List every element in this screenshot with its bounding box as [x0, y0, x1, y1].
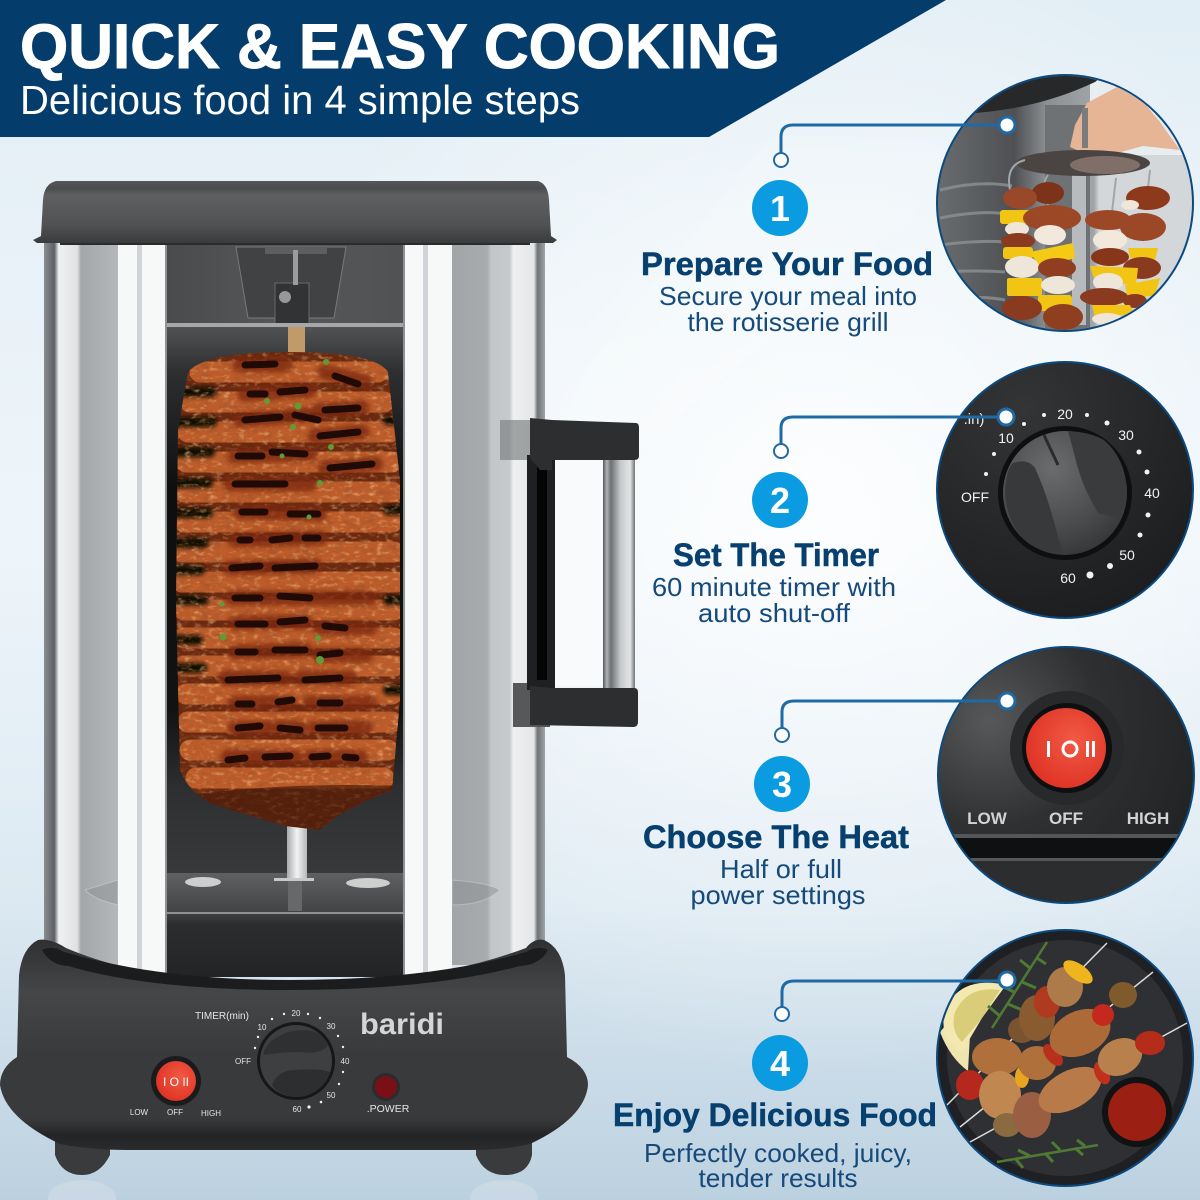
subtitle: Delicious food in 4 simple steps [20, 77, 580, 123]
description: power settings [690, 880, 866, 910]
timer ticks [254, 1013, 344, 1109]
panel labels: TIMER(min) [195, 1011, 249, 1022]
product: rotisserie grill [0, 181, 639, 1175]
glass bottom lip [42, 948, 548, 990]
power switch [151, 1056, 201, 1106]
charred underside [197, 785, 392, 830]
step 2 [652, 355, 1200, 628]
panel labels: 20 [292, 1009, 301, 1018]
leader line [775, 972, 1015, 1021]
description: auto shut-off [698, 598, 851, 628]
panel labels [130, 1009, 410, 1118]
description [659, 281, 917, 337]
leader line [775, 693, 1015, 742]
side shadows [170, 392, 405, 690]
drip tray [85, 873, 500, 977]
description: Secure your meal into [659, 281, 917, 311]
right skewer food [1080, 186, 1170, 325]
herb flecks [220, 359, 334, 664]
left skewer food [1000, 182, 1083, 330]
panel labels: LOW [130, 1108, 149, 1117]
photo: timer dial [930, 355, 1200, 625]
panel labels: 10 [258, 1023, 267, 1032]
panel labels: OFF [235, 1057, 251, 1066]
sear halos [225, 365, 375, 757]
photo: timer dial: 10 [998, 430, 1014, 446]
feet [55, 1140, 532, 1175]
heading: Enjoy Delicious Food [613, 1097, 937, 1133]
panel labels: 60 [293, 1105, 302, 1114]
description: 60 minute timer with [652, 572, 896, 602]
panel labels: OFF [167, 1108, 183, 1117]
brand logo: baridi [360, 1008, 444, 1041]
number badge [752, 1035, 808, 1091]
leader line [774, 409, 1014, 458]
upper chamber [167, 242, 403, 327]
photo: power switch: OFF [1049, 809, 1083, 828]
description: Perfectly cooked, juicy, [644, 1138, 912, 1168]
description: the rotisserie grill [688, 307, 888, 337]
number badge [752, 180, 808, 236]
power switch: I O II [163, 1075, 189, 1089]
photo: timer dial: 20 [1057, 406, 1073, 422]
number badge: 3 [772, 764, 792, 805]
panel labels: 50 [327, 1091, 336, 1100]
heading: Set The Timer [673, 537, 879, 573]
door handle [500, 418, 639, 727]
timer knob [257, 1022, 335, 1100]
lemon [940, 983, 1006, 1071]
grain texture [170, 345, 405, 835]
photo: grilled skewers [930, 925, 1200, 1195]
skewer sticks [947, 943, 1187, 1142]
panel labels: .POWER [367, 1103, 410, 1115]
left glass panel [44, 240, 118, 975]
step 1 [641, 70, 1200, 340]
panel labels: 40 [341, 1057, 350, 1066]
photo: hanging skewers [935, 70, 1200, 340]
photo: timer dial: 60 [1060, 570, 1076, 586]
number badge: 2 [770, 480, 790, 521]
heading: Prepare Your Food [641, 246, 933, 282]
skewer foods [956, 956, 1165, 1138]
photo: power switch: LOW [967, 809, 1008, 828]
sear marks [228, 364, 372, 760]
leader line [774, 117, 1015, 167]
lower chamber [167, 327, 403, 873]
top lid [33, 181, 557, 245]
number badge: 1 [770, 188, 790, 229]
rosemary [988, 942, 1098, 1168]
spit rod [274, 327, 314, 911]
panel labels: 30 [327, 1022, 336, 1031]
title banner [0, 0, 946, 137]
heading: Choose The Heat [643, 819, 909, 855]
number badge [754, 756, 810, 812]
description [644, 1138, 912, 1193]
description [690, 854, 866, 910]
step 3 [643, 640, 1200, 911]
photo: timer dial: OFF [961, 489, 989, 505]
door frame strips [118, 242, 452, 977]
panel labels: HIGH [201, 1109, 221, 1118]
meat kebab [170, 345, 405, 835]
photo: timer dial: .in) [964, 411, 984, 428]
power lamp [372, 1073, 400, 1101]
base [0, 940, 588, 1150]
title: QUICK & EASY COOKING [20, 12, 780, 82]
photo: timer dial: 30 [1118, 427, 1134, 443]
description: tender results [698, 1163, 858, 1193]
photo: power switch [930, 640, 1200, 911]
step 4 [613, 925, 1200, 1195]
right glass panel [452, 240, 545, 965]
rib ridges [182, 372, 396, 778]
number badge: 4 [770, 1043, 790, 1084]
photo: timer dial: 50 [1119, 547, 1135, 563]
number badge [752, 472, 808, 528]
photo: power switch: HIGH [1127, 809, 1169, 828]
description [652, 572, 896, 628]
photo: timer dial: 40 [1144, 485, 1160, 501]
description: Half or full [720, 854, 842, 884]
sauce bowl [1102, 1077, 1172, 1147]
